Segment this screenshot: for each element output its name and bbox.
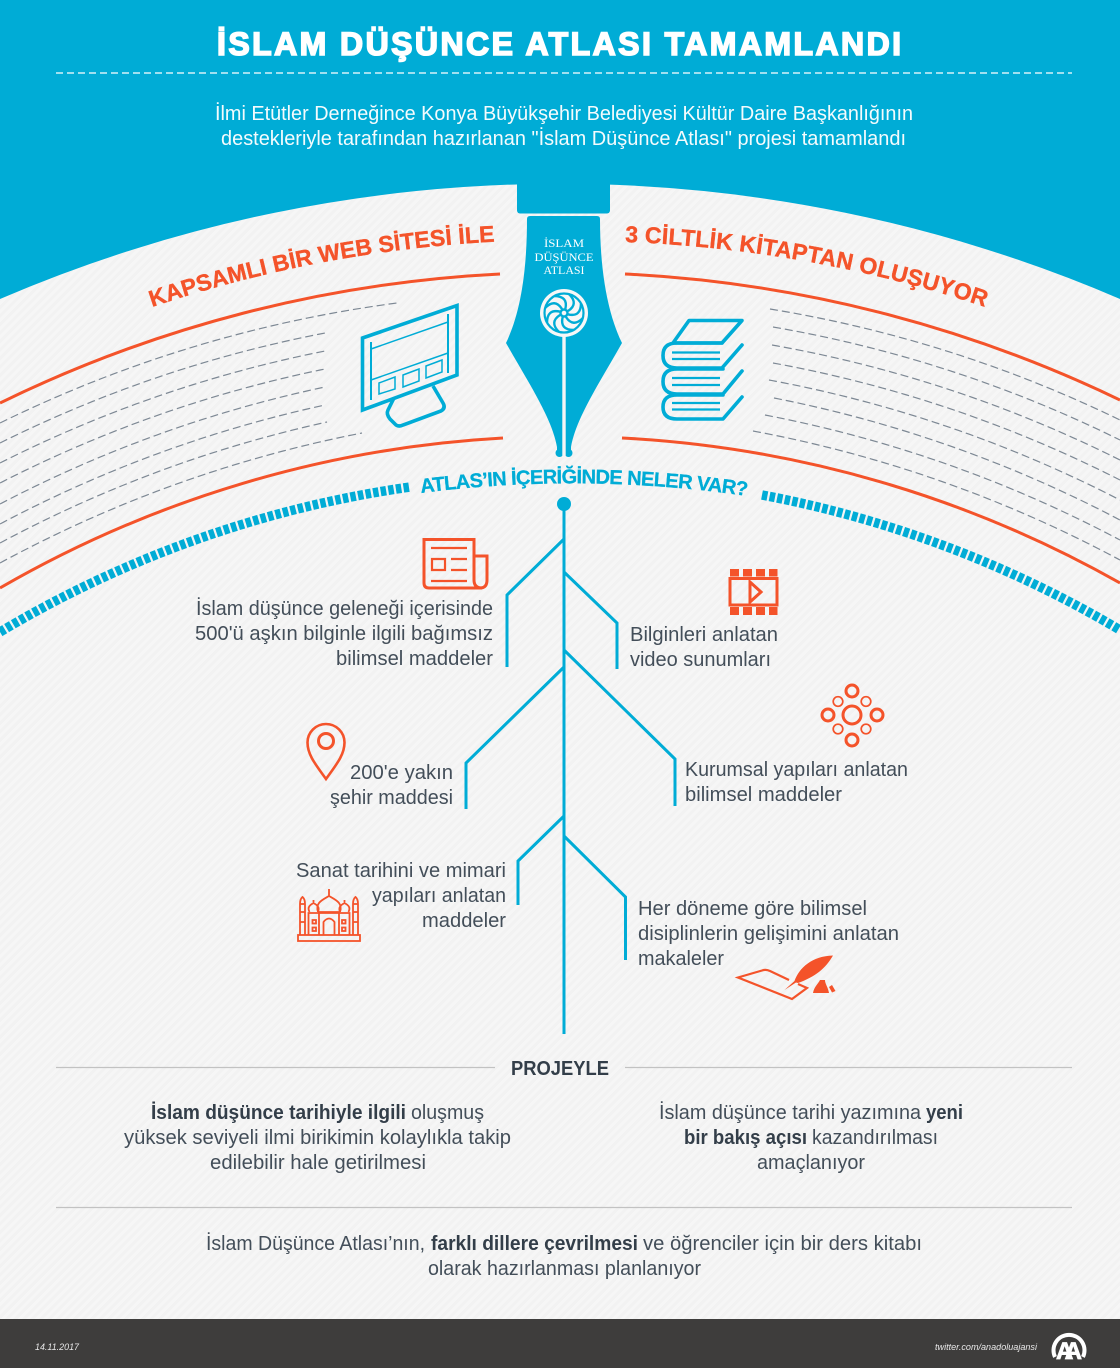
text: left goal: edilebilir hale getirilmesi: [210, 1152, 426, 1174]
text: left goal: İslam düşünce tarihiyle ilgili: [151, 1101, 406, 1124]
icon: map pin: [308, 724, 344, 779]
text: future plans: olarak hazırlanması planlanıyor: [428, 1258, 701, 1280]
text: left goal: oluşmuş: [411, 1102, 484, 1124]
icon: network circles: [822, 685, 883, 746]
date: 14.11.2017: [35, 1342, 80, 1352]
text: future plans: farklı dillere çevrilmesi: [431, 1233, 638, 1255]
item: institutional articles: bilimsel maddeler: [685, 784, 842, 806]
footer: [0, 1319, 1120, 1368]
item: discipline articles: disiplinlerin gelişimini anlatan: [638, 923, 899, 945]
social handle: twitter.com/anadoluajansi: [935, 1342, 1038, 1352]
item: city articles: 200'e yakın: [350, 762, 453, 784]
item: art history and architecture: Sanat tarihini ve mimari: [296, 860, 506, 882]
item: independent scholarly articles: 500'ü aşkın bilginle ilgili bağımsız: [195, 623, 493, 645]
tree trunk and branches: [466, 497, 675, 1034]
item: art history and architecture: [296, 860, 506, 941]
text: left goal: [124, 1101, 511, 1174]
icon: books: [663, 320, 742, 419]
text: right goal: kazandırılması: [812, 1127, 938, 1149]
item: discipline articles: makaleler: [638, 948, 724, 970]
item: city articles: şehir maddesi: [330, 787, 453, 809]
section heading: contents: [0, 466, 1120, 636]
section: project goals: [56, 1058, 1072, 1174]
icon: newspaper: [424, 540, 487, 588]
text: right goal: İslam düşünce tarihi yazımına: [659, 1101, 922, 1124]
icon: mosque: [298, 889, 360, 941]
text: right goal: [659, 1101, 963, 1174]
subtitle: destekleriyle tarafından hazırlanan "İslam Düşünce Atlası" projesi tamamlandı: [221, 127, 906, 150]
item: video presentations: [630, 569, 778, 671]
heading: books: 3 CİLTLİK KİTAPTAN OLUŞUYOR: [626, 224, 988, 307]
subtitle: [215, 102, 913, 150]
item: discipline articles: [638, 898, 899, 999]
icon: quill and paper: [738, 956, 836, 999]
text: future plans: İslam Düşünce Atlası’nın,: [206, 1232, 425, 1255]
text: right goal: amaçlanıyor: [757, 1152, 865, 1174]
pen logo text: ATLASI: [544, 263, 584, 277]
text: left goal: yüksek seviyeli ilmi birikimin kolaylıkla takip: [124, 1127, 511, 1149]
item: city articles: [308, 724, 453, 809]
text: right goal: bir bakış açısı: [684, 1127, 807, 1149]
subtitle: İlmi Etütler Derneğince Konya Büyükşehir Belediyesi Kültür Daire Başkanlığının: [215, 102, 913, 125]
pen logo text: İSLAM: [544, 236, 584, 250]
section heading: contents: ATLAS’IN İÇERİĞİNDE NELER VAR?: [421, 466, 748, 496]
item: video presentations: video sunumları: [630, 649, 771, 671]
item: independent scholarly articles: [195, 540, 493, 670]
heading: project: PROJEYLE: [511, 1058, 609, 1080]
item: art history and architecture: yapıları anlatan: [372, 885, 506, 907]
text: right goal: yeni: [926, 1102, 963, 1124]
text: future plans: [206, 1232, 922, 1280]
logo: agency: AA: [1056, 1338, 1082, 1365]
left section: website: [0, 224, 504, 590]
item: art history and architecture: maddeler: [422, 910, 506, 932]
pen logo text: DÜŞÜNCE: [534, 250, 594, 264]
item: video presentations: Bilginleri anlatan: [630, 624, 778, 646]
header band: [0, 0, 1120, 299]
item: independent scholarly articles: İslam düşünce geleneği içerisinde: [196, 597, 493, 620]
icon: fountain pen nib: [506, 170, 622, 458]
heading: website: KAPSAMLI BİR WEB SİTESİ İLE: [148, 224, 494, 307]
title: İSLAM DÜŞÜNCE ATLASI TAMAMLANDI: [217, 26, 901, 62]
right section: books: [622, 224, 1120, 584]
pen logo text: [534, 236, 594, 277]
icon: monitor: [362, 306, 457, 426]
item: institutional articles: [685, 685, 908, 806]
item: institutional articles: Kurumsal yapıları anlatan: [685, 759, 908, 781]
text: future plans: ve öğrenciler için bir ders kitabı: [643, 1233, 922, 1255]
item: discipline articles: Her döneme göre bilimsel: [638, 898, 867, 920]
item: independent scholarly articles: bilimsel maddeler: [336, 648, 493, 670]
icon: film strip: [730, 569, 778, 615]
rosette emblem: [540, 289, 588, 337]
